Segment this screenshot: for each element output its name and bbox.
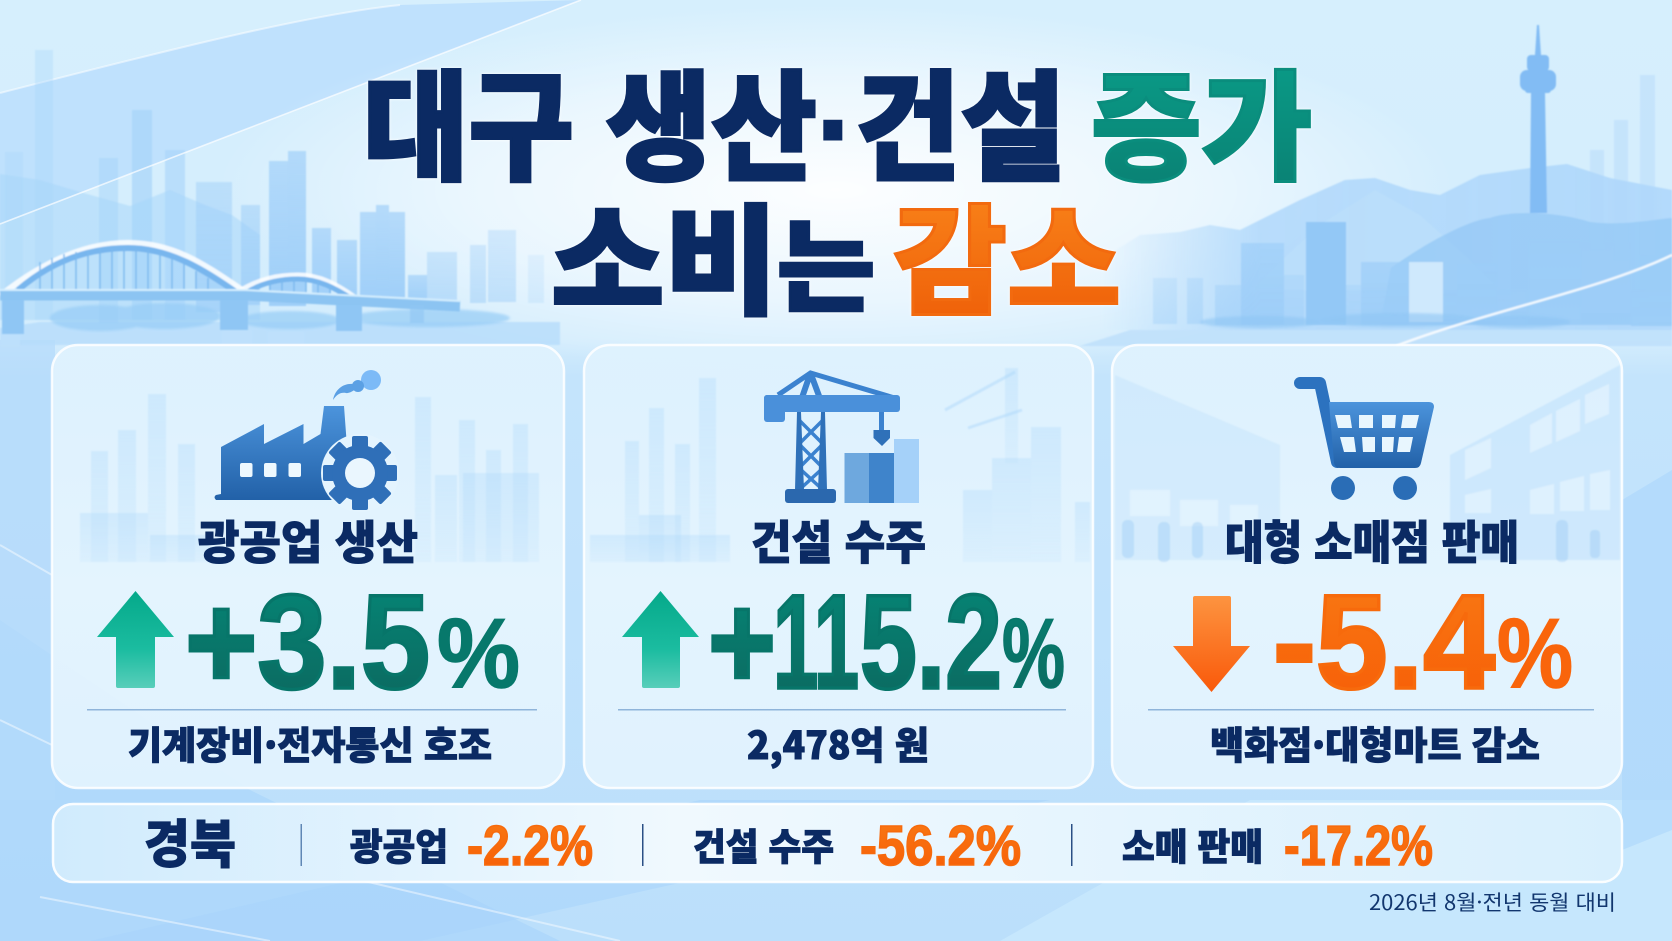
- tower: [1520, 25, 1556, 213]
- value: +3.5%: %: [437, 598, 520, 708]
- title line 2 navy: 소비: [551, 197, 778, 330]
- title line 2 particle: 는: [777, 213, 875, 325]
- value: -5.4%: -5.4: [1273, 568, 1495, 717]
- panel: Gyeongbuk summary bar: [53, 803, 1622, 882]
- title line 1 navy: 대구 생산·건설: [363, 63, 1066, 196]
- value: +115.2%: +: [708, 568, 776, 717]
- title line 1 teal: 증가: [1091, 63, 1312, 196]
- icon: crane with bars: [764, 373, 919, 503]
- heading: industrial production: 광공업 생산: [198, 507, 418, 573]
- panel: industrial production: [52, 345, 564, 788]
- value: -56.2%: -56.2%: [860, 814, 1021, 878]
- panel: large retail sales: [1112, 345, 1622, 788]
- value: -5.4%: %: [1497, 598, 1573, 708]
- item: construction: 건설 수주: [693, 817, 834, 871]
- panel: construction orders: [584, 345, 1093, 788]
- item: retail: 소매 판매: [1122, 817, 1263, 871]
- ghost shopping mall: [1115, 365, 1620, 562]
- arrow up: [622, 591, 699, 688]
- label: Gyeongbuk: 경북: [144, 803, 236, 878]
- item: industrial: 광공업: [350, 817, 448, 871]
- icon: shopping cart: [1300, 383, 1434, 500]
- title line 2 orange: 감소: [893, 197, 1121, 330]
- icon: factory with gear: [214, 370, 399, 512]
- bridge: [0, 243, 460, 306]
- heading: large retail sales: 대형 소매점 판매: [1225, 507, 1519, 573]
- heading: construction orders: 건설 수주: [751, 507, 926, 573]
- ghost factory skyline: [80, 394, 539, 562]
- left city skyline with bridge: [0, 50, 560, 347]
- value: +115.2%: %: [1002, 598, 1065, 708]
- note: machinery and telecom: 기계장비·전자통신 호조: [128, 715, 492, 770]
- value: +3.5%: +3.5: [185, 568, 430, 717]
- right city skyline with tower and mountains: [1080, 25, 1672, 346]
- value: -17.2%: -17.2%: [1284, 814, 1433, 878]
- title: [363, 63, 1312, 330]
- value: +115.2%: [708, 568, 1065, 717]
- arrow down: [1173, 596, 1250, 692]
- ghost construction skyline: [590, 368, 1090, 562]
- value: -2.2%: -2.2%: [467, 814, 593, 878]
- note: order amount: 2,478억 원: [747, 715, 929, 770]
- source note: 2026년 8월·전년 동월 대비: [1369, 887, 1616, 917]
- value: +115.2%: 5.2: [860, 568, 1002, 717]
- note: department stores and marts: 백화점·대형마트 감소: [1210, 715, 1540, 770]
- arrow up: [97, 591, 174, 688]
- value: +115.2%: 11: [773, 568, 859, 717]
- white diagonal light line: [0, 0, 581, 224]
